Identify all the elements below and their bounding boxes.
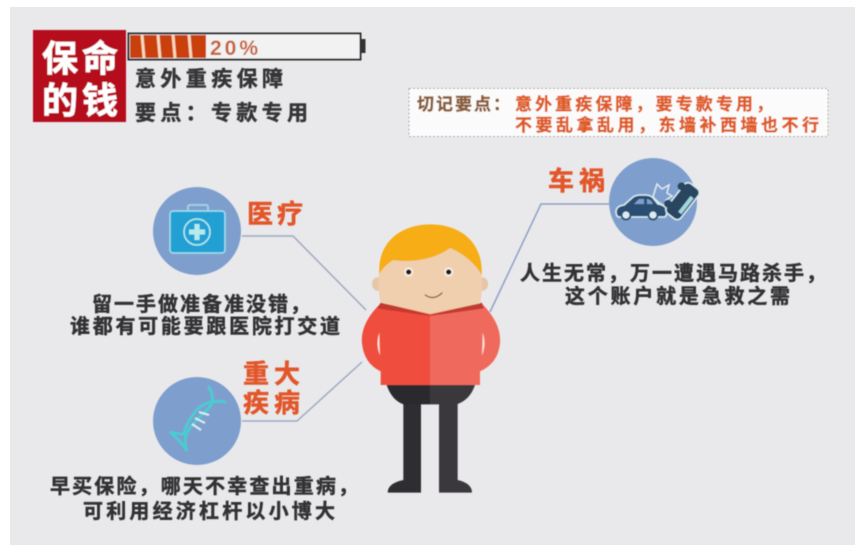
text: medical line 2: 谁都有可能要跟医院打交道 xyxy=(70,314,340,338)
text: critical illness: 早买保险，哪天不幸查出重病， xyxy=(50,474,358,498)
text: medical: 留一手做准备准没错， xyxy=(92,292,310,316)
callout: reminder box: 意外重疾保障，要专款专用， xyxy=(515,94,773,114)
heading: critical illness xyxy=(243,359,300,418)
battery gauge 20% xyxy=(128,34,366,60)
subtitle: key point: 要点：专款专用 xyxy=(135,102,308,125)
connector: medical xyxy=(242,236,366,310)
heading: medical: 医疗 xyxy=(247,199,303,229)
callout: reminder box: 切记要点： xyxy=(417,95,510,114)
heading block: red title badge: 保命 xyxy=(42,38,118,79)
heading block: red title badge: 的钱 xyxy=(42,80,118,121)
torso xyxy=(362,303,500,385)
subtitle: type of cover: 意外重疾保障 xyxy=(135,67,283,91)
heading: car accident: 车祸 xyxy=(548,166,605,196)
icon: car crash xyxy=(609,158,701,246)
heading: critical illness: 重大 xyxy=(243,359,300,389)
callout: reminder box: 不要乱拿乱用，东墙补西墙也不行 xyxy=(515,115,819,135)
shoes and legs xyxy=(387,385,475,493)
heading: critical illness: 疾病 xyxy=(243,388,300,418)
heading block: red title badge xyxy=(33,30,126,122)
icon: medical kit xyxy=(153,187,241,275)
connector: critical illness xyxy=(242,362,362,421)
battery gauge 20%: 20% xyxy=(210,37,258,60)
text: car accident line 2: 这个账户就是急救之需 xyxy=(565,284,790,308)
icon: DNA xyxy=(153,377,241,465)
character: person xyxy=(362,224,500,493)
connector: car accident xyxy=(490,204,609,312)
text: car accident: 人生无常，万一遭遇马路杀手， xyxy=(520,262,826,285)
head xyxy=(372,224,488,314)
text: critical illness line 2: 可利用经济杠杆以小博大 xyxy=(83,499,335,523)
callout: reminder box xyxy=(409,88,828,136)
